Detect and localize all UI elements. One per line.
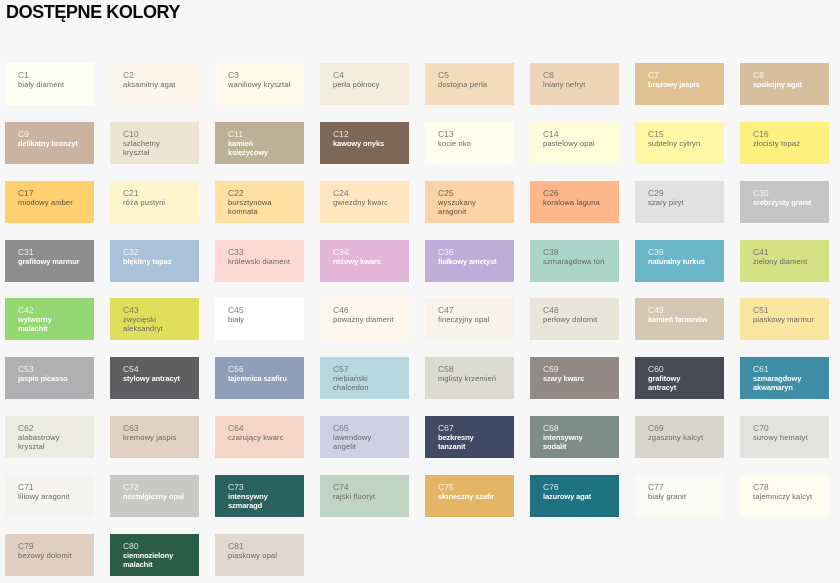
swatch C24: gwiezdny kwarc [333, 198, 388, 207]
swatch C24 [320, 181, 409, 223]
swatch C43 [110, 298, 199, 340]
swatch C63: C63 [123, 423, 139, 433]
swatch C41: C41 [753, 247, 769, 257]
swatch C10: szlachetny [123, 139, 160, 148]
swatch C49: kamień faraonów [648, 315, 707, 324]
swatch C22: C22 [228, 188, 244, 198]
swatch C10: kryształ [123, 148, 150, 156]
swatch C11: kamień [228, 139, 253, 148]
swatch C10 [110, 122, 199, 164]
swatch C12 [320, 122, 409, 164]
swatch C80: ciemnozielony [123, 551, 173, 560]
swatch C10: C10 [123, 129, 139, 139]
swatch C64: czarujący kwarc [228, 433, 284, 442]
swatch C16: C16 [753, 129, 769, 139]
swatch C29 [635, 181, 724, 223]
swatch C33: C33 [228, 247, 244, 257]
swatch C7: brązowy jaspis [648, 80, 700, 89]
swatch C42: wytworny [18, 315, 52, 324]
swatch C48: C48 [543, 305, 559, 315]
swatch C71 [5, 475, 94, 517]
swatch C29: C29 [648, 188, 664, 198]
swatch C60: antracyt [648, 382, 676, 392]
swatch C43: aleksandryt [123, 324, 163, 332]
swatch C48: perłowy dolomit [543, 315, 597, 324]
swatch C15 [635, 122, 724, 164]
swatch C69: zgaszony kalcyt [648, 433, 703, 442]
swatch C41: zielony diament [753, 257, 807, 266]
swatch C36: fiołkowy ametyst [438, 257, 497, 266]
swatch C77 [635, 475, 724, 517]
swatch C26: C26 [543, 188, 559, 198]
swatch C61 [740, 357, 829, 399]
swatch C25: C25 [438, 188, 454, 198]
swatch C42 [5, 298, 94, 340]
swatch C11: C11 [228, 129, 243, 139]
swatch C49 [635, 298, 724, 340]
swatch C46: poważny diament [333, 315, 394, 324]
swatch C57: C57 [333, 364, 349, 374]
swatch C24: C24 [333, 188, 349, 198]
swatch C63: kremowy jaspis [123, 433, 176, 442]
swatch C38: C38 [543, 247, 559, 257]
swatch C13: C13 [438, 129, 454, 139]
swatch C57: chalcedon [333, 382, 369, 392]
swatch C25: aragonit [438, 206, 466, 216]
swatch C54: stylowy antracyt [123, 374, 180, 383]
swatch C47 [425, 298, 514, 340]
swatch C62 [5, 416, 94, 458]
swatch C81: piaskowy opal [228, 551, 277, 560]
swatch C4 [320, 63, 409, 105]
swatch C79 [5, 534, 94, 576]
swatch C6: C6 [543, 70, 554, 80]
swatch C78: tajemniczy kalcyt [753, 492, 812, 501]
swatch C70 [740, 416, 829, 458]
swatch C53: jaspis picasso [18, 374, 68, 383]
swatch C2: C2 [123, 70, 134, 80]
swatch C45 [215, 298, 304, 340]
swatch C59: C59 [543, 364, 559, 374]
swatch C72: C72 [123, 482, 139, 492]
swatch C1: C1 [18, 70, 29, 80]
swatch C42: C42 [18, 305, 34, 315]
swatch C56: C56 [228, 364, 244, 374]
swatch C9: C9 [18, 129, 29, 139]
swatch C14: C14 [543, 129, 559, 139]
swatch C70: C70 [753, 423, 769, 433]
swatch C38 [530, 240, 619, 282]
swatch C42: malachit [18, 324, 47, 332]
swatch C68: intensywny [543, 433, 583, 442]
swatch C60: grafitowy [648, 374, 680, 383]
swatch C72: nostalgiczny opal [123, 492, 184, 501]
swatch C68: sodalit [543, 442, 566, 450]
swatch C6: lniany nefryt [543, 80, 585, 89]
swatch C47: fineczyjny opal [438, 315, 489, 324]
swatch C17: C17 [18, 188, 34, 198]
swatch C34: różowy kwarc [333, 257, 381, 266]
swatch C67: tanzanit [438, 442, 465, 450]
swatch C58: C58 [438, 364, 454, 374]
swatch C57 [320, 357, 409, 399]
swatch C16: złocisty topaz [753, 139, 800, 148]
swatch C67: bezkresny [438, 433, 474, 442]
swatch C26: koralowa laguna [543, 198, 600, 207]
swatch C14 [530, 122, 619, 164]
swatch C2 [110, 63, 199, 105]
swatch C5: C5 [438, 70, 449, 80]
swatch C8 [740, 63, 829, 105]
swatch C36 [425, 240, 514, 282]
swatch C46 [320, 298, 409, 340]
swatch C32: C32 [123, 247, 139, 257]
swatch C61: C61 [753, 364, 769, 374]
swatch C69 [635, 416, 724, 458]
swatch C74: rajski fluoryt [333, 492, 375, 501]
swatch C48 [530, 298, 619, 340]
swatch C39: C39 [648, 247, 664, 257]
swatch C3: waniliowy kryształ [228, 80, 290, 89]
swatch C73: C73 [228, 482, 244, 492]
swatch C75: słoneczny szafir [438, 492, 494, 501]
swatch C4: C4 [333, 70, 344, 80]
swatch C31 [5, 240, 94, 282]
swatch C51: C51 [753, 305, 769, 315]
swatch C39 [635, 240, 724, 282]
swatch C30 [740, 181, 829, 223]
swatch C38: szmaragdowa toń [543, 257, 604, 266]
swatch C45: C45 [228, 305, 244, 315]
swatch C81 [215, 534, 304, 576]
swatch C6 [530, 63, 619, 105]
swatch C54: C54 [123, 364, 139, 374]
swatch C36: C36 [438, 247, 454, 257]
swatch C57: niebiański [333, 374, 368, 383]
swatch C71: C71 [18, 482, 34, 492]
swatch C65: C65 [333, 423, 349, 433]
swatch C31: C31 [18, 247, 34, 257]
swatch C21 [110, 181, 199, 223]
swatch C51 [740, 298, 829, 340]
swatch C21: róża pustyni [123, 198, 165, 207]
swatch C9: delikatny bronzyt [18, 139, 78, 148]
swatch C59 [530, 357, 619, 399]
swatch C80: malachit [123, 560, 152, 568]
swatch C79: beżowy dolomit [18, 551, 72, 560]
swatch C43: zwycięski [123, 315, 156, 324]
swatch C56: tajemnica szafiru [228, 374, 287, 383]
swatch C80 [110, 534, 199, 576]
swatch C33: królewski diament [228, 257, 290, 266]
swatch C8: spokojny agat [753, 80, 802, 89]
swatch C77: C77 [648, 482, 664, 492]
swatch C25: wyszukany [438, 198, 476, 207]
swatch C61: szmaragdowy [753, 374, 801, 383]
swatch C32: błękitny topaz [123, 257, 171, 266]
swatch C73: szmaragd [228, 500, 262, 510]
swatch C22: komnata [228, 206, 258, 216]
swatch C45: biały [228, 315, 244, 324]
swatch C67 [425, 416, 514, 458]
swatch C49: C49 [648, 305, 664, 315]
swatch C22 [215, 181, 304, 223]
swatch C11 [215, 122, 304, 164]
swatch C25 [425, 181, 514, 223]
swatch C76 [530, 475, 619, 517]
swatch C65: lawendowy [333, 433, 371, 442]
swatch C72 [110, 475, 199, 517]
swatch C15: C15 [648, 129, 664, 139]
swatch C53 [5, 357, 94, 399]
swatch C29: szary piryt [648, 198, 684, 207]
swatch C79: C79 [18, 541, 34, 551]
swatch C8: C8 [753, 70, 764, 80]
swatch C30: C30 [753, 188, 769, 198]
swatch C62: C62 [18, 423, 34, 433]
swatch C54 [110, 357, 199, 399]
swatch C75 [425, 475, 514, 517]
swatch C7 [635, 63, 724, 105]
swatch C74 [320, 475, 409, 517]
swatch C61: akwamaryn [753, 382, 793, 392]
swatch C64: C64 [228, 423, 244, 433]
swatch C22: bursztynowa [228, 198, 272, 207]
swatch C64 [215, 416, 304, 458]
swatch C62: kryształ [18, 442, 45, 450]
swatch C67: C67 [438, 423, 454, 433]
swatch C11: księżycowy [228, 148, 268, 156]
swatch C68: C68 [543, 423, 559, 433]
swatch C43: C43 [123, 305, 139, 315]
swatch C13: kocie oko [438, 139, 471, 148]
swatch C51: piaskowy marmur [753, 315, 814, 324]
swatch C3 [215, 63, 304, 105]
swatch C76: lazurowy agat [543, 492, 591, 501]
swatch C21: C21 [123, 188, 139, 198]
swatch C73: intensywny [228, 492, 268, 501]
swatch C5: dostojna perła [438, 80, 487, 89]
swatch C65 [320, 416, 409, 458]
swatch C4: perła północy [333, 80, 380, 89]
swatch C1: biały diament [18, 80, 64, 89]
swatch C16 [740, 122, 829, 164]
swatch C26 [530, 181, 619, 223]
swatch C1 [5, 63, 94, 105]
swatch C69: C69 [648, 423, 664, 433]
swatch C7: C7 [648, 70, 659, 80]
swatch C73 [215, 475, 304, 517]
swatch C34: C34 [333, 247, 349, 257]
swatch C17: miodowy amber [18, 198, 73, 207]
swatch C12: kawowy onyks [333, 139, 384, 148]
swatch C60: C60 [648, 364, 664, 374]
swatch C59: szary kwarc [543, 374, 584, 383]
swatch C12: C12 [333, 129, 349, 139]
swatch C56 [215, 357, 304, 399]
swatch C81: C81 [228, 541, 244, 551]
swatch C32 [110, 240, 199, 282]
swatch C77: biały granit [648, 492, 686, 501]
swatch C68 [530, 416, 619, 458]
swatch C65: angelit [333, 442, 356, 450]
swatch C71: liliowy aragonit [18, 492, 70, 501]
swatch C47: C47 [438, 305, 454, 315]
swatch C13 [425, 122, 514, 164]
swatch C58: mglisty krzemień [438, 374, 496, 383]
swatch C76: C76 [543, 482, 559, 492]
swatch C60 [635, 357, 724, 399]
swatch C3: C3 [228, 70, 239, 80]
swatch C9 [5, 122, 94, 164]
swatch C53: C53 [18, 364, 34, 374]
swatch C70: surowy hematyt [753, 433, 808, 442]
swatch C74: C74 [333, 482, 349, 492]
swatch C80: C80 [123, 541, 139, 551]
swatch C15: subtelny cytryn [648, 139, 700, 148]
swatch C2: aksamitny agat [123, 80, 176, 89]
swatch C30: srebrzysty granit [753, 198, 811, 207]
swatch C17 [5, 181, 94, 223]
swatch C62: alabastrowy [18, 433, 60, 442]
swatch C75: C75 [438, 482, 454, 492]
swatch C31: grafitowy marmur [18, 257, 79, 266]
title: DOSTĘPNE KOLORY [6, 2, 180, 22]
swatch C14: pastelowy opal [543, 139, 595, 148]
swatch C58 [425, 357, 514, 399]
swatch C46: C46 [333, 305, 349, 315]
swatch C78: C78 [753, 482, 769, 492]
swatch C41 [740, 240, 829, 282]
swatch C39: naturalny turkus [648, 257, 705, 266]
swatch C63 [110, 416, 199, 458]
swatch C34 [320, 240, 409, 282]
swatch C5 [425, 63, 514, 105]
swatch C33 [215, 240, 304, 282]
swatch C78 [740, 475, 829, 517]
